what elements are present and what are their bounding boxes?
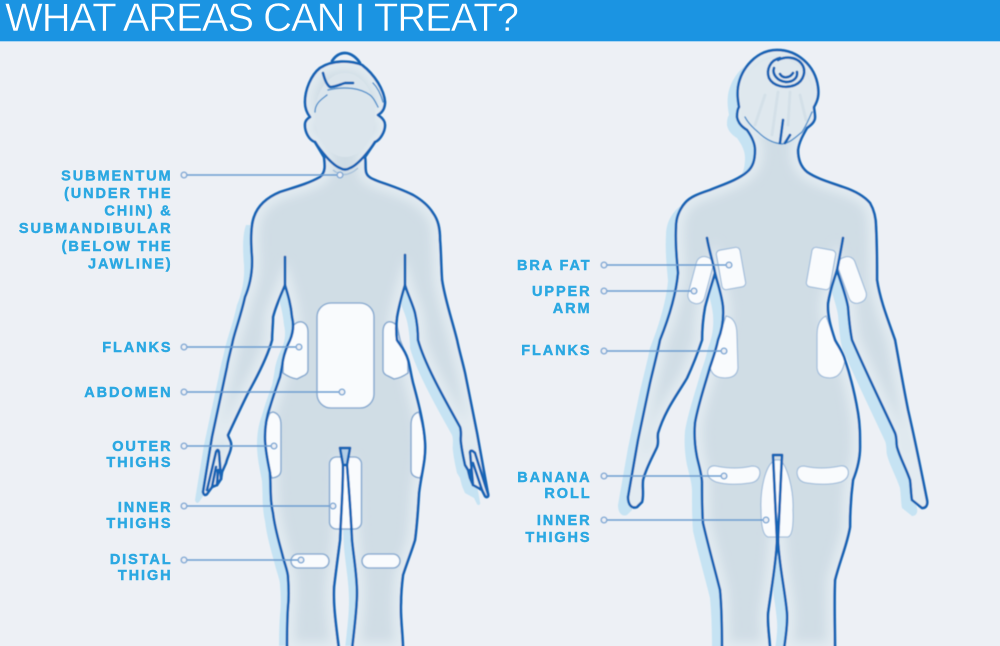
back body figure	[618, 50, 927, 646]
patch: right distal thigh	[362, 554, 400, 568]
label: outer thighs: THIGHS	[106, 455, 172, 471]
label: inner thighs: THIGHS	[525, 530, 592, 546]
patch: inner thighs	[761, 460, 793, 537]
patch: left distal thigh	[291, 554, 329, 568]
patch: right flank	[383, 322, 408, 379]
patch: right bra fat	[806, 247, 836, 290]
label: submentum: (UNDER THE	[64, 186, 172, 202]
label: distal thigh: THIGH	[118, 568, 172, 584]
hair streaks	[755, 92, 806, 135]
leader: flanks	[601, 348, 727, 354]
icon: right fingers	[470, 451, 488, 494]
head tint	[318, 74, 371, 156]
leader: bra fat	[601, 262, 732, 268]
back outline	[628, 50, 927, 646]
front labels	[19, 168, 172, 584]
label: submentum: (BELOW THE	[62, 239, 172, 255]
patch: right flank	[817, 316, 845, 378]
label: submentum: JAWLINE)	[88, 256, 172, 272]
hair tint	[748, 60, 808, 142]
label: distal thigh: DISTAL	[110, 552, 172, 568]
label: submentum: SUBMANDIBULAR	[19, 221, 172, 237]
patch: right upper arm	[835, 254, 869, 306]
patch: left bra fat	[716, 247, 746, 290]
label: submentum: CHIN) &	[104, 204, 172, 220]
label: upper arm: UPPER	[532, 284, 592, 300]
label: inner thighs: THIGHS	[106, 516, 172, 532]
patch: left outer thigh	[265, 412, 281, 478]
icon: hair bun	[768, 58, 804, 87]
patch: left flank	[710, 316, 738, 378]
leader: outer thighs	[181, 443, 277, 449]
label: inner thighs: INNER	[118, 500, 172, 516]
back leader lines	[601, 262, 769, 523]
leader: abdomen	[181, 389, 345, 395]
patch: left banana roll	[708, 466, 760, 484]
label: upper arm: ARM	[553, 301, 592, 317]
label: submentum: SUBMENTUM	[61, 168, 172, 184]
leader: banana roll	[601, 473, 727, 479]
patch: right banana roll	[797, 466, 848, 484]
patch: right outer thigh	[411, 412, 425, 478]
title banner	[0, 0, 1000, 42]
leader: upper arm	[601, 288, 697, 294]
patch: left upper arm	[686, 255, 715, 306]
label: bra fat: BRA FAT	[517, 258, 592, 274]
label: flanks: FLANKS	[102, 340, 172, 356]
front body figure	[195, 53, 488, 646]
label: banana roll: ROLL	[544, 486, 592, 502]
front treatment patches	[265, 168, 425, 568]
patch: submentum	[333, 168, 358, 175]
label: banana roll: BANANA	[517, 470, 592, 486]
patch: left flank	[283, 322, 308, 379]
leader: submentum	[181, 172, 343, 178]
patch: inner thighs	[330, 457, 362, 529]
leader: distal thigh	[181, 557, 304, 563]
label: inner thighs: INNER	[537, 513, 592, 529]
patch: abdomen	[317, 303, 374, 408]
leader: inner thighs	[601, 517, 769, 523]
label: outer thighs: OUTER	[112, 439, 172, 455]
leader: inner thighs	[181, 503, 336, 509]
front outline	[203, 53, 488, 646]
label: flanks: FLANKS	[521, 343, 592, 359]
label: abdomen: ABDOMEN	[84, 385, 172, 401]
icon: left fingers	[207, 450, 221, 490]
back treatment patches	[686, 247, 869, 537]
back labels	[517, 258, 592, 546]
front leader lines	[181, 172, 345, 563]
leader: flanks	[181, 344, 302, 350]
